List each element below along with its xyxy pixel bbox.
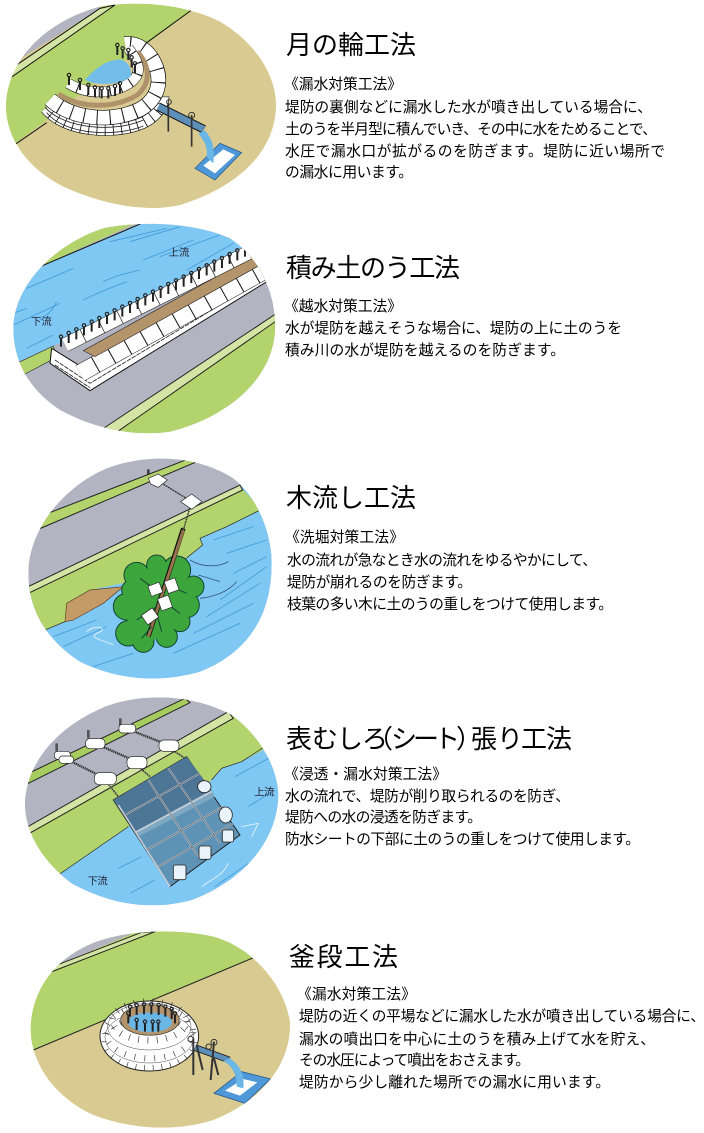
label: downstream: 下流 — [88, 876, 108, 888]
drainage mat — [214, 1058, 271, 1103]
label: upstream: 上流 — [254, 787, 274, 799]
stakes — [59, 245, 247, 347]
body text: 《越水対策工法》 — [284, 298, 402, 315]
body text: 漏水の噴出口を中心に土のうを積み上げて水を貯え、 — [299, 1031, 655, 1048]
bank edge — [58, 740, 275, 875]
far strip — [35, 458, 197, 530]
body text: 堤防から少し離れた場所での漏水に用います。 — [299, 1074, 610, 1091]
outflow pipe — [188, 1036, 229, 1080]
body text: 土のうを半月型に積んでいき、その中に水をためることで、 — [285, 121, 657, 138]
levee slope — [29, 490, 259, 630]
panel: 月の輪工法 — [0, 0, 665, 220]
river — [15, 740, 290, 917]
sandbag stack — [50, 253, 271, 391]
label: downstream: 下流 — [31, 316, 52, 328]
branches — [137, 578, 187, 638]
near bank strip — [19, 346, 55, 374]
shoulder strip — [43, 932, 155, 975]
road — [28, 458, 272, 678]
stakes — [67, 43, 137, 98]
illustration: half-moon sandbag ring — [6, 4, 276, 208]
body text — [284, 766, 640, 848]
water ripples — [13, 227, 233, 348]
body text: 水の流れで、堤防が削り取られるのを防ぎ、 — [285, 788, 570, 805]
illustration: sheet laid on levee — [24, 698, 278, 906]
outflow pipe — [158, 100, 204, 147]
heading: 積み土のう工法 — [286, 253, 460, 283]
eroded bank — [65, 587, 123, 622]
far bank — [43, 224, 134, 265]
ground — [6, 4, 276, 208]
body text: 《洗堀対策工法》 — [285, 529, 404, 546]
brown fill and water — [121, 1005, 179, 1035]
ropes across the road — [57, 718, 185, 797]
body text: 水が堤防を越えそうな場合に、堤防の上に土のうを — [285, 320, 622, 337]
anchor sandbags on levee — [54, 724, 179, 785]
panel: 積み土のう工法 — [0, 220, 622, 440]
tree foliage fill — [114, 556, 203, 652]
illustration: tree anchored in river — [28, 458, 272, 678]
body text: 堤防が崩れるのを防ぎます。 — [287, 574, 472, 591]
water ripples — [118, 757, 275, 893]
body text: 《漏水対策工法》 — [297, 986, 416, 1003]
heading: 木流し工法 — [286, 483, 416, 513]
river — [29, 486, 272, 678]
body text: 水圧で漏水口が拡がるのを防ぎます。堤防に近い場所で — [285, 143, 665, 160]
rope and anchor bags — [141, 469, 202, 625]
road — [22, 6, 100, 58]
body text: の漏水に用います。 — [285, 164, 413, 181]
stakes — [127, 1003, 177, 1032]
panel: 表むしろ（シート）張り工法 — [24, 698, 630, 906]
tree trunk fill — [148, 530, 183, 637]
body text — [284, 298, 622, 359]
water pool — [85, 59, 131, 84]
road — [14, 224, 276, 434]
illustration: ring of sandbags around boil — [20, 925, 297, 1133]
body text — [297, 986, 704, 1091]
body text: 防水シートの下部に土のうの重しをつけて使用します。 — [285, 831, 640, 848]
drainage mat — [195, 131, 242, 180]
far strip — [25, 698, 190, 783]
lower levee strip and field — [108, 315, 276, 434]
pool — [128, 1012, 172, 1032]
sandbag ring — [100, 1001, 199, 1071]
body text: 堤防への水の浸透を防ぎます。 — [285, 809, 482, 826]
body text: 水の流れが急なとき水の流れをゆるやかにして、 — [287, 552, 597, 569]
levee slope — [6, 4, 191, 143]
levee slope — [20, 925, 258, 1057]
body text: 《浸透・漏水対策工法》 — [284, 766, 447, 783]
label: upstream: 上流 — [169, 247, 189, 259]
bank edge — [45, 509, 262, 630]
river — [13, 224, 251, 362]
body text: 堤防の近くの平場などに漏水した水が噴き出している場合に、 — [299, 1008, 704, 1025]
heading: 釜段工法 — [289, 942, 398, 972]
road shoulder — [7, 5, 115, 79]
body text — [285, 529, 613, 613]
shoulder strip — [25, 712, 233, 834]
tree foliage — [113, 555, 204, 652]
heading: 表むしろ（シート）張り工法 — [286, 724, 572, 754]
heading: 月の輪工法 — [286, 30, 416, 60]
water ripples — [53, 527, 267, 667]
ground — [20, 925, 297, 1133]
body text: 積み川の水が堤防を越えるのを防ぎます。 — [285, 342, 565, 359]
panel: 釜段工法 — [20, 925, 704, 1133]
sheet — [113, 757, 240, 887]
body text: その水圧によって噴出をおさえます。 — [299, 1052, 530, 1069]
road — [15, 690, 290, 917]
body text: 《漏水対策工法》 — [284, 76, 402, 93]
body text: 枝葉の多い木に土のうの重しをつけて使用します。 — [287, 595, 613, 613]
body text: 堤防の裏側などに漏水した水が噴き出している場合に、 — [285, 99, 652, 116]
body text — [284, 76, 665, 181]
tree trunk — [148, 528, 183, 637]
sandbag weights on sheet — [173, 781, 234, 880]
sandbag ring — [45, 44, 163, 133]
road — [20, 925, 133, 985]
illustration: stacked sandbags on levee — [13, 224, 276, 434]
panel: 木流し工法 — [28, 458, 604, 678]
levee slope — [22, 715, 275, 875]
